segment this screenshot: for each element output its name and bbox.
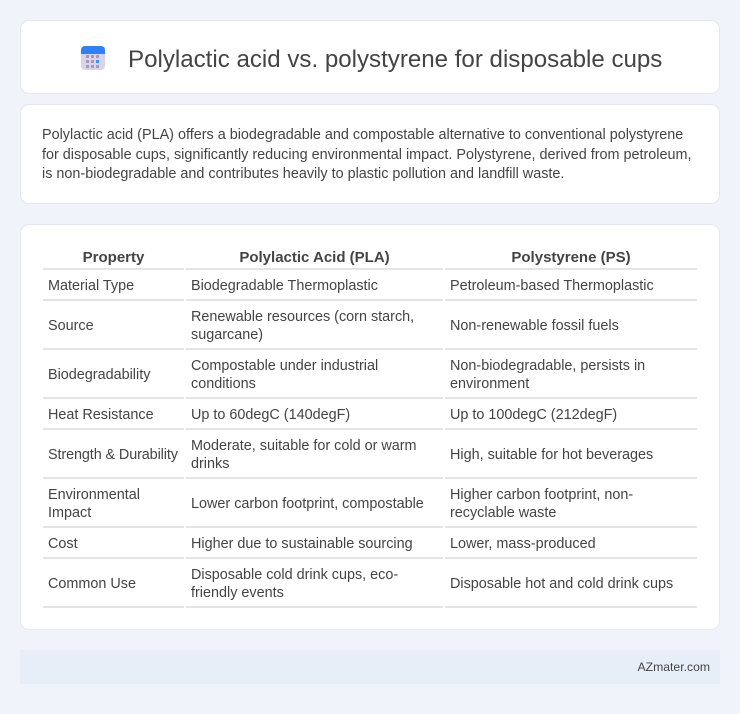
text: High, suitable for hot beverages (450, 447, 653, 463)
footer credit: AZmater.com (638, 660, 710, 674)
text: Higher carbon footprint, non- (450, 487, 633, 503)
text: drinks (191, 456, 229, 472)
row: environmental impact (48, 487, 140, 521)
text: Disposable hot and cold drink cups (450, 576, 673, 592)
text: Renewable resources (corn starch, (191, 309, 414, 325)
table header: PS: Polystyrene (PS) (511, 249, 631, 266)
text: Petroleum-based Thermoplastic (450, 278, 654, 294)
row: cost: Cost (48, 536, 78, 552)
text: Lower carbon footprint, compostable (191, 496, 424, 512)
panel: intro text (20, 104, 720, 204)
intro paragraph (42, 127, 692, 182)
intro paragraph: for disposable cups, significantly reducing environmental impact. Polystyrene, derived from petroleum, (42, 146, 692, 162)
text: Non-biodegradable, persists in (450, 358, 645, 374)
text: conditions (191, 376, 256, 392)
panel: title header (20, 20, 720, 94)
row: material type: Material Type (48, 278, 134, 294)
row: common use: Common Use (48, 576, 136, 592)
row: source: Source (48, 318, 94, 334)
text: Non-renewable fossil fuels (450, 318, 619, 334)
intro paragraph: Polylactic acid (PLA) offers a biodegradable and compostable alternative to conventional polystyrene (42, 127, 683, 143)
row: environmental impact: Impact (48, 505, 91, 521)
text: Lower, mass-produced (450, 536, 596, 552)
text: environment (450, 376, 529, 392)
icon: calendar (81, 46, 105, 70)
table header: PLA: Polylactic Acid (PLA) (239, 249, 390, 266)
text: Biodegradable Thermoplastic (191, 278, 378, 294)
row: strength: Strength & Durability (48, 447, 178, 463)
text: Higher due to sustainable sourcing (191, 536, 413, 552)
text: recyclable waste (450, 505, 556, 521)
row: heat resistance: Heat Resistance (48, 407, 154, 423)
text: Moderate, suitable for cold or warm (191, 438, 417, 454)
text: Up to 60degC (140degF) (191, 407, 350, 423)
row: environmental impact: Environmental (48, 487, 140, 503)
text: Compostable under industrial (191, 358, 378, 374)
title: Polylactic acid vs. polystyrene for disposable cups (128, 46, 662, 73)
text: Up to 100degC (212degF) (450, 407, 617, 423)
intro paragraph: is non-biodegradable and contributes heavily to plastic pollution and landfill waste. (42, 166, 564, 182)
text: Disposable cold drink cups, eco- (191, 567, 398, 583)
text: friendly events (191, 585, 284, 601)
footer bar (20, 650, 720, 684)
panel: comparison table (20, 224, 720, 630)
table header: property: Property (83, 249, 144, 266)
row: biodegradability: Biodegradability (48, 367, 150, 383)
text: sugarcane) (191, 327, 263, 343)
